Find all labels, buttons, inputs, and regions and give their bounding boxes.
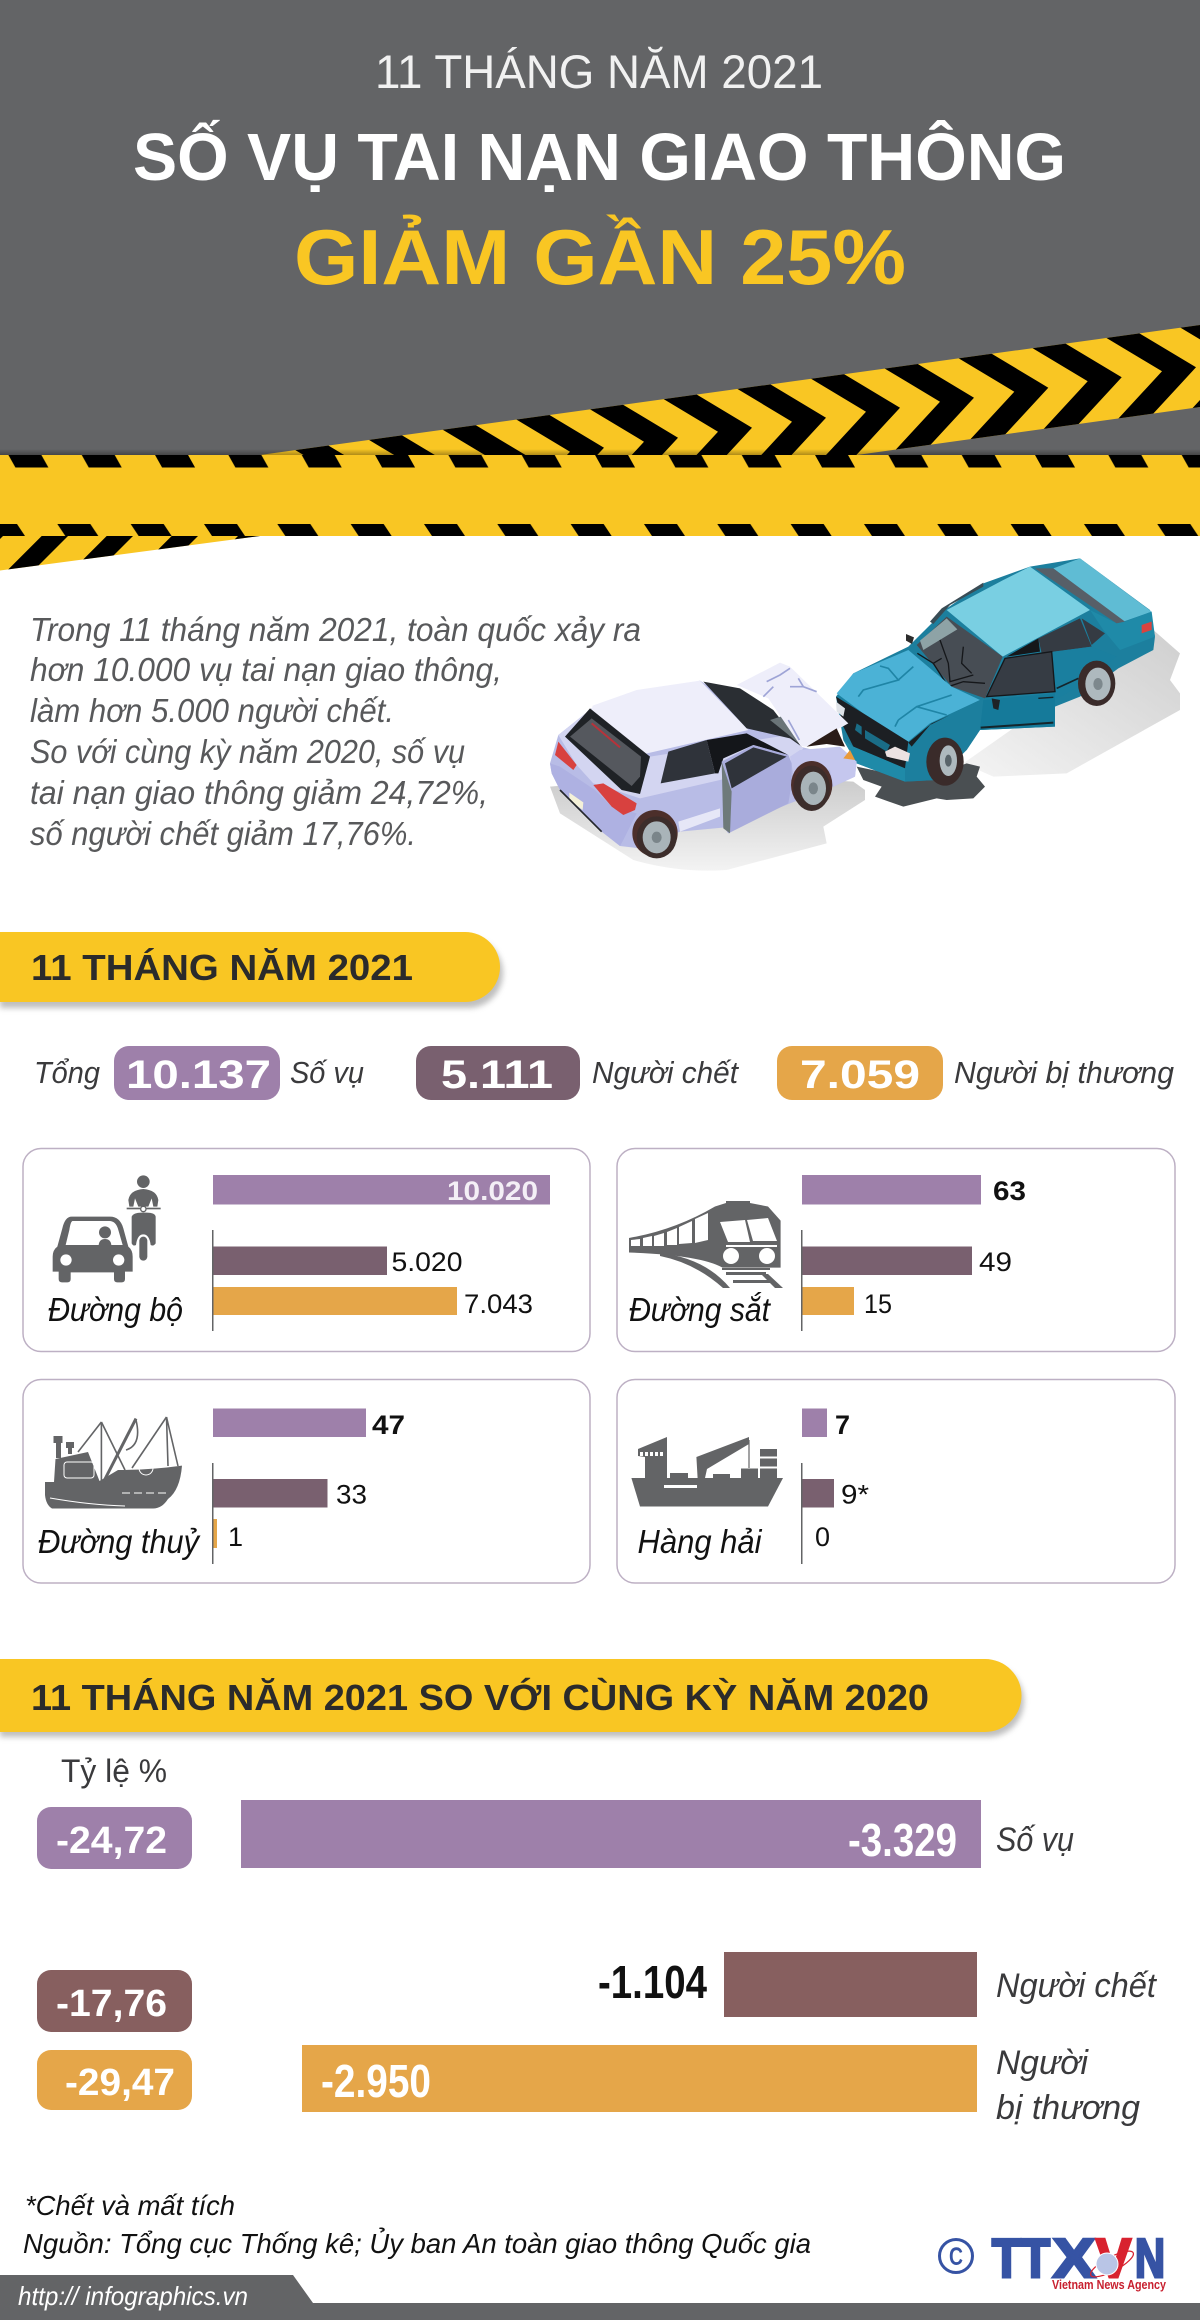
icon: train bbox=[629, 1201, 783, 1288]
comparison bar: cases: -3.329 bbox=[848, 1814, 957, 1866]
bars: maritime: 9* bbox=[841, 1480, 870, 1510]
header background bbox=[0, 0, 1200, 455]
illustration: two crashed cars bbox=[550, 558, 1180, 871]
total: deaths pill bbox=[416, 1046, 580, 1100]
bars: road: 5.020 bbox=[392, 1247, 462, 1277]
bars: waterway: 33 bbox=[336, 1480, 367, 1510]
caution tape: lower left tail bbox=[0, 536, 260, 570]
icon: car and motorbike bbox=[53, 1175, 161, 1282]
title block bbox=[133, 45, 1066, 301]
icon: fishing boat bbox=[45, 1417, 182, 1508]
percent pill: deaths: -17,76 bbox=[56, 1983, 167, 2025]
comparison labels: bị thương bbox=[996, 2089, 1140, 2127]
percent pill: injured: -29,47 bbox=[65, 2062, 175, 2104]
section heading: comparison: 11 THÁNG NĂM 2021 SO VỚI CÙNG KỲ NĂM 2020 bbox=[31, 1676, 929, 1718]
totals row bbox=[34, 1046, 1174, 1100]
panel: rail bbox=[617, 1148, 1175, 1352]
intro text block: hơn 10.000 vụ tai nạn giao thông, bbox=[30, 651, 502, 688]
caution tape: horizontal band bbox=[0, 449, 1200, 536]
label: road: Đường bộ bbox=[48, 1291, 183, 1328]
footnote and source bbox=[23, 2190, 811, 2259]
comparison labels: Số vụ bbox=[996, 1821, 1074, 1859]
comparison labels: Người bbox=[996, 2044, 1089, 2082]
comparison bar: deaths bbox=[598, 1952, 977, 2017]
label: injured: Người bị thương bbox=[954, 1055, 1174, 1090]
copyright symbol bbox=[940, 2240, 972, 2272]
intro text block: Trong 11 tháng năm 2021, toàn quốc xảy ra bbox=[30, 611, 641, 648]
logo: TTXVN bbox=[992, 2227, 1167, 2292]
total: deaths pill: 5.111 bbox=[441, 1053, 553, 1097]
total: cases pill bbox=[114, 1046, 280, 1100]
panel: road bbox=[23, 1148, 590, 1352]
copyright symbol: C bbox=[949, 2243, 963, 2271]
bars: road: 10.020 bbox=[447, 1176, 538, 1206]
bars: road bbox=[212, 1175, 550, 1331]
percent pill: cases bbox=[37, 1807, 192, 1869]
intro text block: So với cùng kỳ năm 2020, số vụ bbox=[30, 733, 465, 770]
bars: rail: 49 bbox=[979, 1247, 1012, 1277]
bars: rail bbox=[801, 1175, 1026, 1331]
bars: maritime: 7 bbox=[835, 1410, 850, 1440]
blue car bbox=[836, 558, 1180, 807]
title: period: 11 THÁNG NĂM 2021 bbox=[375, 45, 823, 98]
title: highlighted heading: GIẢM GẦN 25% bbox=[294, 213, 906, 301]
footnote and source: *Chết và mất tích bbox=[25, 2190, 235, 2221]
caution tape: diagonal chevron ribbon bbox=[260, 325, 1200, 455]
label: maritime: Hàng hải bbox=[638, 1523, 763, 1560]
panel: maritime bbox=[617, 1380, 1175, 1583]
icon: cargo ship bbox=[631, 1437, 783, 1506]
bars: waterway: 1 bbox=[228, 1522, 243, 1552]
logo: TTXVN: Vietnam News Agency bbox=[1052, 2277, 1167, 2292]
percent pill: injured bbox=[37, 2050, 192, 2110]
comparison bar: cases bbox=[241, 1800, 981, 1868]
section heading: comparison bbox=[0, 1659, 1024, 1737]
bars: waterway: 47 bbox=[372, 1410, 405, 1440]
label: deaths: Người chết bbox=[592, 1055, 739, 1090]
total: injured pill bbox=[777, 1046, 943, 1100]
title: main heading: SỐ VỤ TAI NẠN GIAO THÔNG bbox=[133, 119, 1066, 195]
total: injured pill: 7.059 bbox=[800, 1053, 920, 1097]
section heading: 11 months 2021 bbox=[0, 932, 503, 1008]
percent column label: Tỷ lệ % bbox=[61, 1753, 167, 1789]
percent pill: deaths bbox=[37, 1970, 192, 2032]
intro text block: làm hơn 5.000 người chết. bbox=[30, 692, 394, 729]
logo: TTXVN: V bbox=[1096, 2227, 1131, 2289]
logo: TTXVN: X bbox=[1053, 2227, 1095, 2289]
comparison bar: injured: -2.950 bbox=[321, 2055, 431, 2107]
bars: maritime bbox=[801, 1408, 870, 1564]
percent pill: cases: -24,72 bbox=[56, 1820, 167, 1862]
bars: waterway bbox=[212, 1408, 405, 1564]
intro text block bbox=[30, 611, 641, 852]
comparison labels bbox=[996, 1821, 1157, 2127]
intro text block: tai nạn giao thông giảm 24,72%, bbox=[30, 774, 488, 811]
logo: TTXVN: N bbox=[1135, 2227, 1165, 2289]
comparison bar: injured bbox=[302, 2045, 977, 2112]
label: waterway: Đường thuỷ bbox=[38, 1523, 201, 1560]
panel: waterway bbox=[23, 1380, 590, 1583]
bars: rail: 63 bbox=[993, 1176, 1026, 1206]
intro text block: số người chết giảm 17,76%. bbox=[30, 815, 416, 852]
comparison bar: deaths: -1.104 bbox=[598, 1956, 707, 2008]
total label: Tổng bbox=[34, 1055, 100, 1090]
bars: road: 7.043 bbox=[464, 1289, 533, 1319]
label: cases: Số vụ bbox=[290, 1055, 364, 1090]
logo: TTXVN: TT bbox=[992, 2227, 1050, 2289]
footnote and source: Nguồn: Tổng cục Thống kê; Ủy ban An toàn giao thông Quốc gia bbox=[23, 2226, 811, 2259]
white car bbox=[550, 663, 865, 871]
footer bar with URL: http:// infographics.vn bbox=[18, 2281, 248, 2311]
footer bar with URL bbox=[0, 2275, 1200, 2320]
section heading: 11 months 2021: 11 THÁNG NĂM 2021 bbox=[31, 947, 413, 988]
bars: maritime: 0 bbox=[815, 1522, 830, 1552]
comparison labels: Người chết bbox=[996, 1967, 1157, 2005]
total: cases pill: 10.137 bbox=[126, 1053, 271, 1097]
label: rail: Đường sắt bbox=[629, 1291, 772, 1328]
bars: rail: 15 bbox=[864, 1289, 892, 1319]
